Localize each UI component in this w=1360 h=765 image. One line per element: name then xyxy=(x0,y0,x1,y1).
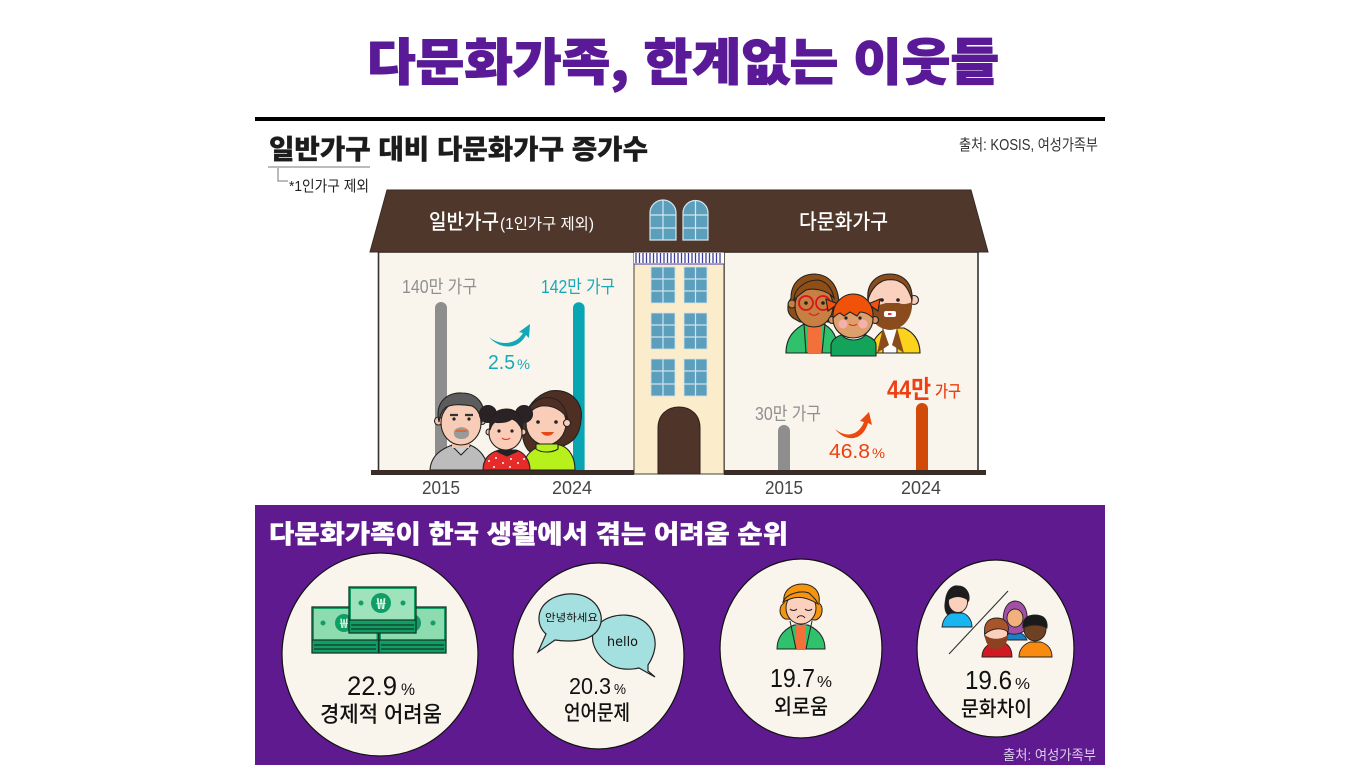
divider line xyxy=(949,591,1008,654)
section heading: household growth: 일반가구 대비 다문화가구 증가수 xyxy=(269,128,648,167)
year 2015: 2015 xyxy=(422,478,460,498)
icon: multicultural family xyxy=(786,274,920,356)
growth 2.5%: % xyxy=(517,356,530,372)
item 3: loneliness xyxy=(720,559,882,738)
bar 2015 xyxy=(778,425,790,470)
woman xyxy=(942,586,972,627)
bar 2024 xyxy=(573,302,585,470)
value 142: 142만 가구 xyxy=(541,277,615,297)
value 44: 44만 xyxy=(887,376,931,404)
label: general households: (1인가구 제외) xyxy=(500,215,594,233)
value 19.7%: % xyxy=(817,674,832,691)
title: 다문화가족, 한계없는 이웃들 xyxy=(367,23,999,95)
label: multicultural households: 다문화가구 xyxy=(799,206,888,236)
man in orange xyxy=(1019,615,1052,657)
house illustration xyxy=(370,190,988,474)
value 140: 140만 가구 xyxy=(402,277,477,297)
central tower xyxy=(634,252,724,474)
item 4: cultural difference xyxy=(917,560,1074,737)
growth 46.8% xyxy=(829,441,885,463)
attic windows xyxy=(650,200,708,240)
daughter xyxy=(480,406,532,470)
icon: culture divide xyxy=(942,586,1052,657)
icon: speech bubbles: 안녕하세요 xyxy=(545,610,598,625)
value 19.6%: 19.6 xyxy=(965,665,1012,695)
floor line xyxy=(371,470,986,475)
woman in hijab xyxy=(1003,601,1027,640)
value 44 xyxy=(887,376,961,404)
source: KOSIS: 출처: KOSIS, 여성가족부 xyxy=(959,136,1098,154)
right wall xyxy=(724,252,978,472)
item 1: economic hardship xyxy=(282,553,478,756)
roof xyxy=(370,190,988,252)
growth 46.8%: 46.8 xyxy=(829,441,870,463)
bar chart: multicultural households xyxy=(755,376,961,498)
icon: money stacks: ₩ xyxy=(376,593,387,614)
icon: money stacks: ₩ xyxy=(339,613,348,632)
growth 2.5% xyxy=(488,352,530,374)
daughter with red hair xyxy=(826,294,880,356)
icon: money stacks xyxy=(312,587,446,653)
label: 언어문제 xyxy=(564,697,630,727)
panel: difficulties ranking xyxy=(255,505,1105,765)
value 19.6%: % xyxy=(1015,676,1030,693)
value 20.3%: % xyxy=(614,681,626,698)
bar chart: general households xyxy=(402,277,615,498)
bar 2015 xyxy=(435,302,447,470)
mother xyxy=(522,391,581,470)
value 20.3%: 20.3 xyxy=(569,673,611,699)
label: 외로움 xyxy=(774,691,828,721)
bearded man xyxy=(982,618,1012,657)
father with beard xyxy=(868,274,920,353)
value 44: 가구 xyxy=(935,378,961,402)
value 22.9%: 22.9 xyxy=(347,671,397,701)
bar 2024 xyxy=(916,403,928,470)
value 19.7%: 19.7 xyxy=(770,663,815,693)
arrow up orange xyxy=(835,412,872,438)
panel heading: 다문화가족이 한국 생활에서 겪는 어려움 순위 xyxy=(269,514,788,551)
value 22.9%: % xyxy=(401,680,415,699)
label: general households xyxy=(429,206,594,236)
footnote: excludes single-person households: *1인가구 제외 xyxy=(289,178,369,195)
footnote: excludes single-person households xyxy=(268,167,370,195)
item 2: language problems xyxy=(513,563,684,749)
father xyxy=(430,393,488,470)
icon: speech bubbles xyxy=(538,594,655,677)
year 2024: 2024 xyxy=(552,478,592,498)
year 2024: 2024 xyxy=(901,478,941,498)
label: 문화차이 xyxy=(961,693,1032,723)
value 30: 30만 가구 xyxy=(755,404,821,424)
year 2015: 2015 xyxy=(765,478,803,498)
growth 2.5%: 2.5 xyxy=(488,352,515,374)
arrow up teal xyxy=(489,324,530,346)
icon: korean family xyxy=(430,391,581,470)
left wall xyxy=(378,252,634,472)
mother with glasses xyxy=(786,274,839,353)
source: ministry: 출처: 여성가족부 xyxy=(1003,747,1096,763)
growth 46.8%: % xyxy=(872,445,885,461)
label: general households: 일반가구 xyxy=(429,206,499,236)
icon: lonely woman xyxy=(777,584,825,649)
icon: speech bubbles: hello xyxy=(607,635,638,650)
label: 경제적 어려움 xyxy=(320,697,442,729)
